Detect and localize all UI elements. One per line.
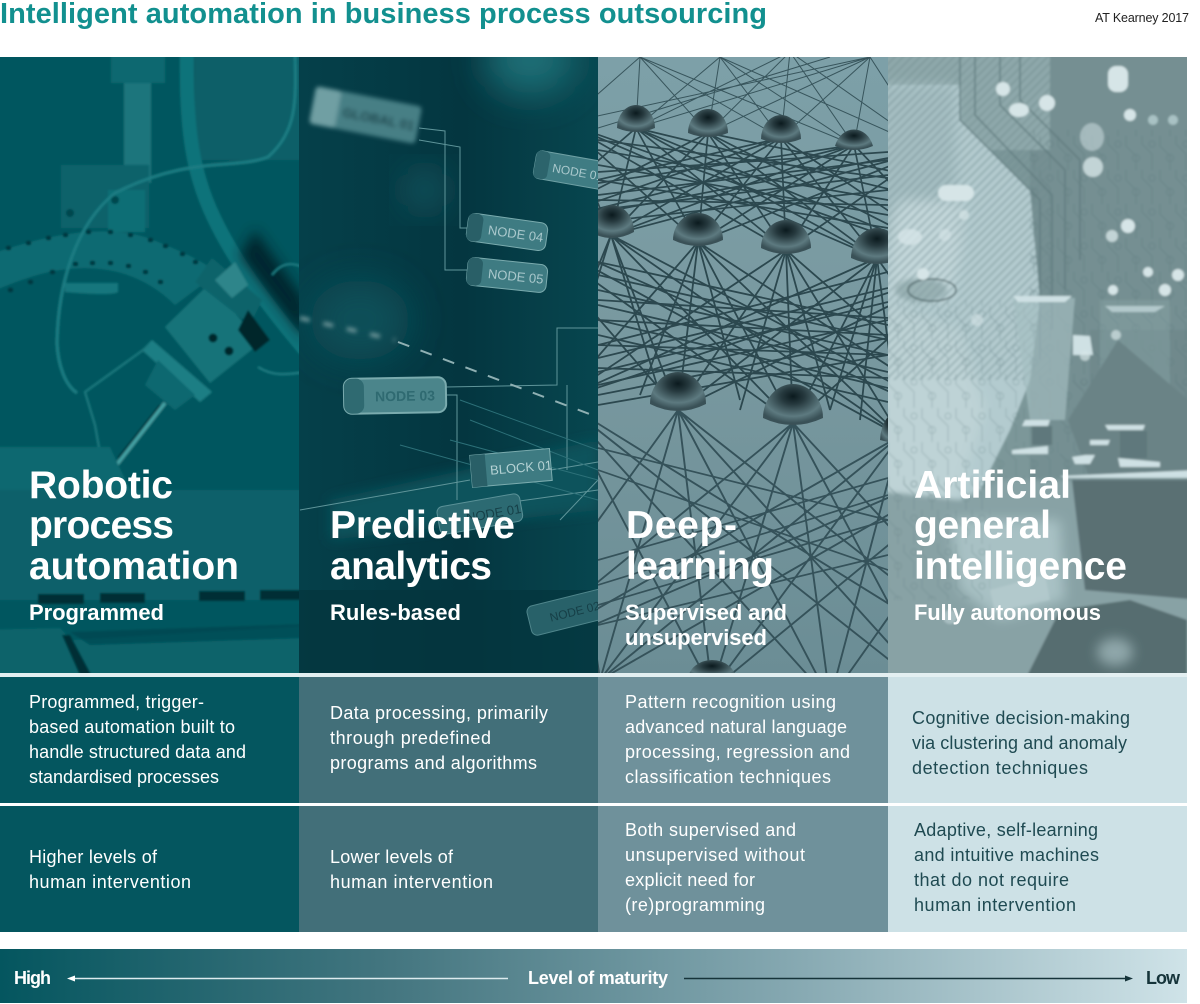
text: deep-learning intervention: (re)programming bbox=[625, 895, 765, 915]
maturity gradient bar bbox=[0, 949, 1187, 1003]
node: 03 bbox=[344, 377, 446, 414]
heading: robotic process automation: process bbox=[29, 504, 174, 547]
separator lines bbox=[0, 673, 1187, 677]
needle bbox=[111, 403, 165, 472]
text: deep-learning intervention bbox=[625, 820, 805, 915]
text: predictive description bbox=[330, 703, 548, 773]
node: block 01: BLOCK 01 bbox=[489, 457, 553, 478]
background tower shading bbox=[1030, 40, 1200, 490]
heading: artificial general intelligence: intelligence bbox=[914, 545, 1127, 588]
heading: deep-learning: learning bbox=[626, 545, 774, 588]
node: global 01: GLOBAL 01 bbox=[341, 105, 416, 133]
node: 02: NODE 02 bbox=[548, 599, 602, 625]
heading: robotic process automation: Robotic bbox=[29, 464, 173, 507]
subheading: fully autonomous: Fully autonomous bbox=[914, 600, 1101, 625]
node: block 01 bbox=[470, 448, 553, 487]
subheading: supervised and unsupervised bbox=[625, 600, 787, 650]
node connectors bbox=[300, 128, 598, 520]
text: agi description: via clustering and anomaly bbox=[912, 733, 1127, 753]
text: deep-learning description: processing, regression and bbox=[625, 742, 850, 762]
text: predictive intervention: Lower levels of bbox=[330, 847, 454, 867]
text: rpa description: standardised processes bbox=[29, 767, 219, 787]
text: agi intervention: Adaptive, self-learning bbox=[914, 820, 1098, 840]
node: lower 01: NODE 01 bbox=[465, 501, 522, 525]
node: lower 01 bbox=[436, 493, 524, 535]
label: low: Low bbox=[1146, 968, 1181, 988]
panel: artificial general intelligence image bbox=[888, 57, 1187, 673]
source credit: AT Kearney 2017 bbox=[1095, 11, 1189, 25]
node: 05: NODE 05 bbox=[487, 266, 544, 287]
subheading: supervised and unsupervised: Supervised and bbox=[625, 600, 787, 625]
thin cable bbox=[57, 50, 295, 393]
heading: robotic process automation: automation bbox=[29, 545, 239, 588]
text: agi intervention bbox=[914, 820, 1099, 915]
node: bottom bbox=[690, 660, 734, 673]
text: rpa intervention: Higher levels of bbox=[29, 847, 158, 867]
eye bbox=[895, 278, 947, 302]
text: deep-learning description: Pattern recognition using bbox=[625, 692, 836, 712]
text: predictive intervention: human intervention bbox=[330, 872, 493, 892]
text: agi description: Cognitive decision-making bbox=[912, 708, 1130, 728]
text: rpa description: handle structured data and bbox=[29, 742, 246, 762]
arrow: towards low bbox=[684, 976, 1133, 982]
text: agi intervention: and intuitive machines bbox=[914, 845, 1099, 865]
heading: predictive analytics: analytics bbox=[330, 545, 492, 588]
text: agi intervention: that do not require bbox=[914, 870, 1069, 890]
node: global 01 bbox=[309, 86, 422, 144]
heading: deep-learning bbox=[626, 504, 774, 588]
city pillar bbox=[1013, 298, 1075, 420]
text: rpa description: based automation built to bbox=[29, 717, 235, 737]
text: predictive description: Data processing, primarily bbox=[330, 703, 548, 723]
text: deep-learning intervention: explicit need for bbox=[625, 870, 755, 890]
text: deep-learning description bbox=[625, 692, 850, 787]
text: rpa description bbox=[29, 692, 246, 787]
text: rpa intervention: human intervention bbox=[29, 872, 191, 892]
text: predictive description: programs and algorithms bbox=[330, 753, 537, 773]
text: rpa intervention bbox=[29, 847, 191, 892]
panel: deep-learning image bbox=[598, 57, 888, 673]
text: deep-learning intervention: Both supervised and bbox=[625, 820, 796, 840]
text: predictive description: through predefined bbox=[330, 728, 491, 748]
thick tube bbox=[187, 50, 305, 350]
text: agi description: detection techniques bbox=[912, 758, 1088, 778]
nodes: second row bbox=[590, 205, 903, 264]
panel: predictive analytics image bbox=[299, 57, 598, 673]
label: high: High bbox=[14, 968, 51, 988]
dark roof wedge bbox=[1069, 341, 1171, 473]
heading: robotic process automation bbox=[29, 464, 239, 588]
curved arc plate bbox=[0, 231, 215, 305]
subheading: programmed: Programmed bbox=[29, 600, 164, 625]
subheading: rules-based: Rules-based bbox=[330, 600, 461, 625]
subheading: supervised and unsupervised: unsupervised bbox=[625, 625, 767, 650]
node: 04 bbox=[465, 213, 549, 251]
text: deep-learning description: advanced natural language bbox=[625, 717, 847, 737]
row: human intervention cells bbox=[0, 806, 1187, 932]
text: deep-learning intervention: unsupervised without bbox=[625, 845, 805, 865]
heading: artificial general intelligence: general bbox=[914, 504, 1051, 547]
node: 05 bbox=[466, 257, 548, 293]
text: predictive intervention bbox=[330, 847, 493, 892]
nodes: third row bbox=[650, 372, 900, 445]
heading: deep-learning: Deep- bbox=[626, 504, 737, 547]
text: agi description bbox=[912, 708, 1130, 778]
lower machinery bbox=[888, 479, 1187, 673]
chip tiles bbox=[1012, 420, 1200, 478]
lower machine plate bbox=[0, 447, 130, 490]
label: level of maturity: Level of maturity bbox=[528, 968, 668, 988]
heading: artificial general intelligence: Artificial bbox=[914, 464, 1071, 507]
row: description cells bbox=[0, 677, 1187, 803]
bokeh lights bbox=[898, 66, 1184, 361]
node: 02 bbox=[526, 588, 598, 636]
panel: robotic process automation image bbox=[0, 40, 310, 690]
neural network mesh bbox=[598, 57, 888, 673]
text: rpa description: Programmed, trigger- bbox=[29, 692, 204, 712]
heading: artificial general intelligence bbox=[914, 464, 1127, 588]
node: 03: NODE 03 bbox=[375, 387, 435, 404]
text: deep-learning description: classification techniques bbox=[625, 767, 831, 787]
light rays bbox=[400, 400, 598, 500]
heading: predictive analytics bbox=[330, 504, 515, 588]
node: 04: NODE 04 bbox=[487, 222, 544, 245]
face bbox=[888, 84, 1040, 502]
heading: predictive analytics: Predictive bbox=[330, 504, 515, 547]
dashed trail bbox=[398, 342, 600, 418]
nodes: top row bbox=[617, 105, 873, 150]
circuit traces bbox=[888, 302, 1024, 496]
robot head bbox=[165, 288, 253, 383]
arrow: towards high bbox=[67, 976, 508, 982]
text: agi intervention: human intervention bbox=[914, 895, 1076, 915]
icon: robot carriage block bbox=[110, 57, 166, 84]
node: 01 bbox=[532, 150, 598, 190]
node: 01: NODE 01 bbox=[551, 161, 605, 184]
